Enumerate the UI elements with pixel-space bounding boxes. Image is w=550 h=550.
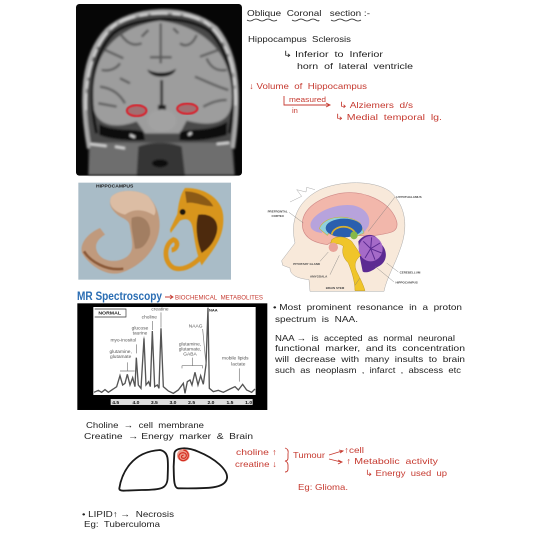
text block: volume of hippocampus notes: in <box>292 106 298 115</box>
panel: brain anatomy diagram <box>268 183 422 291</box>
label lines and anatomical labels: PREFRONTAL <box>268 210 288 214</box>
ppm axis <box>111 399 253 406</box>
text block: choline and creatine changes in tumour: ↑ Metabolic activity <box>346 456 439 466</box>
text block: hippocampus sclerosis <box>248 34 413 71</box>
metabolite labels: GABA <box>183 351 197 357</box>
metabolite labels: glutamate, <box>179 346 201 352</box>
panel: hippocampus and seahorse photo: HIPPOCAMPUS <box>96 183 133 188</box>
heading: MR spectroscopy <box>77 289 264 303</box>
seahorse <box>166 188 223 269</box>
text block: NAA resonance notes: • Most prominent resonance in a proton <box>273 302 462 312</box>
text block: choline and creatine definitions: Choline → cell membrane <box>86 420 204 430</box>
left hemisphere <box>119 450 168 491</box>
metabolite labels: myo-inositol <box>110 338 136 344</box>
panel: hippocampus and seahorse photo <box>78 183 231 280</box>
cerebellum <box>358 235 386 272</box>
ppm axis: 1.5 <box>227 400 234 406</box>
text block: choline and creatine changes in tumour: Eg: Glioma. <box>298 482 348 492</box>
metabolite labels: glutamate <box>110 354 132 360</box>
right hemisphere <box>174 448 227 488</box>
head outline <box>282 183 405 291</box>
text block: volume of hippocampus notes <box>249 81 442 122</box>
text block: NAA resonance notes: such as neoplasm , infarct , abscess etc <box>275 365 462 375</box>
metabolite labels: lactate <box>231 361 246 367</box>
metabolite labels: glutamine, <box>110 349 132 355</box>
text block: volume of hippocampus notes: ↓ Volume of Hippocampus <box>249 81 367 91</box>
label lines and anatomical labels: HYPOTHALAMUS <box>396 195 422 199</box>
metabolite labels: NAAG <box>189 323 203 329</box>
text block: lipid necrosis: • LIPID↑ → Necrosis <box>82 509 174 519</box>
heading: MR spectroscopy: MR Spectroscopy <box>77 289 162 303</box>
label lines and anatomical labels: BRAIN STEM <box>326 286 345 290</box>
metabolite labels: glucose <box>132 326 149 332</box>
text block: choline and creatine definitions: Creatine → Energy marker & Brain <box>84 431 253 441</box>
label lines and anatomical labels: PITUITARY GLAND <box>293 262 321 266</box>
panel: coronal MRI scan <box>76 4 242 176</box>
label lines and anatomical labels: HIPPOCAMPUS <box>396 281 418 285</box>
metabolite labels <box>110 307 249 382</box>
text block: choline and creatine changes in tumour: choline ↑ <box>236 447 277 457</box>
metabolite labels: NAA <box>209 308 218 313</box>
text block: NAA resonance notes: will decrease with many insults to brain <box>274 354 465 364</box>
label lines and anatomical labels: AMYGDALA <box>310 274 328 278</box>
normal tag <box>95 309 126 317</box>
ppm axis: 2.0 <box>208 400 215 406</box>
ppm axis: 4.5 <box>112 400 119 406</box>
brain stem <box>329 237 365 291</box>
text block: volume of hippocampus notes: ↳ Medial temporal lg. <box>335 112 442 122</box>
text block: volume of hippocampus notes: measured <box>289 95 326 104</box>
hippocampus highlight left <box>127 105 146 116</box>
label lines and anatomical labels: CEREBELLUM <box>400 271 421 275</box>
text block: hippocampus sclerosis: Hippocampus Sclerosis <box>248 34 351 44</box>
text block: choline and creatine changes in tumour <box>235 445 447 492</box>
metabolite labels: glutamine, <box>179 342 201 348</box>
text block: volume of hippocampus notes: ↳ Alziemers d/s <box>339 100 413 110</box>
label lines and anatomical labels <box>268 195 422 290</box>
text block: choline and creatine changes in tumour: creatine ↓ <box>235 459 277 469</box>
text block: choline and creatine changes in tumour: ↑cell <box>344 445 364 455</box>
ppm axis: 2.5 <box>188 400 195 406</box>
metabolite labels: taurine <box>133 330 148 336</box>
heading: oblique coronal section: Oblique Coronal section :- <box>247 8 370 18</box>
text block: hippocampus sclerosis: horn of lateral ventricle <box>297 61 413 71</box>
text block: choline and creatine changes in tumour: ↳ Energy used up <box>365 468 447 478</box>
text block: choline and creatine definitions <box>84 420 253 441</box>
hippocampus specimen <box>82 191 160 274</box>
metabolite labels: choline <box>142 315 157 321</box>
metabolite labels: mobile lipids <box>222 356 249 362</box>
text block: NAA resonance notes: functional marker, and its concentration <box>275 343 465 353</box>
text block: lipid necrosis <box>82 509 174 529</box>
metabolite labels: creatine <box>151 307 169 313</box>
heading: MR spectroscopy: BIOCHEMICAL METABOLITES <box>175 294 264 302</box>
tumour spot <box>177 449 190 462</box>
text block: lipid necrosis: Eg: Tuberculoma <box>84 519 160 529</box>
text block: NAA resonance notes: NAA → is accepted as normal neuronal <box>275 333 455 343</box>
hippocampus highlight right <box>177 104 197 114</box>
text block: NAA resonance notes: spectrum is NAA. <box>275 314 358 324</box>
diagram: brain hemispheres with tumour <box>119 448 227 491</box>
ppm axis: 3.0 <box>170 400 177 406</box>
ppm axis: 4.0 <box>133 400 140 406</box>
normal tag: NORMAL <box>98 311 121 316</box>
spectrum trace <box>94 308 255 393</box>
ppm axis: 3.5 <box>151 400 158 406</box>
heading: oblique coronal section <box>247 8 370 21</box>
label lines and anatomical labels: CORTEX <box>271 214 284 218</box>
text block: NAA resonance notes <box>273 302 465 375</box>
ppm axis: 1.0 <box>245 400 252 406</box>
panel: spectroscopy chart <box>77 303 267 410</box>
text block: hippocampus sclerosis: ↳ Inferior to Inferior <box>283 49 383 59</box>
text block: choline and creatine changes in tumour: Tumour <box>293 450 325 460</box>
cerebrum <box>302 193 397 245</box>
